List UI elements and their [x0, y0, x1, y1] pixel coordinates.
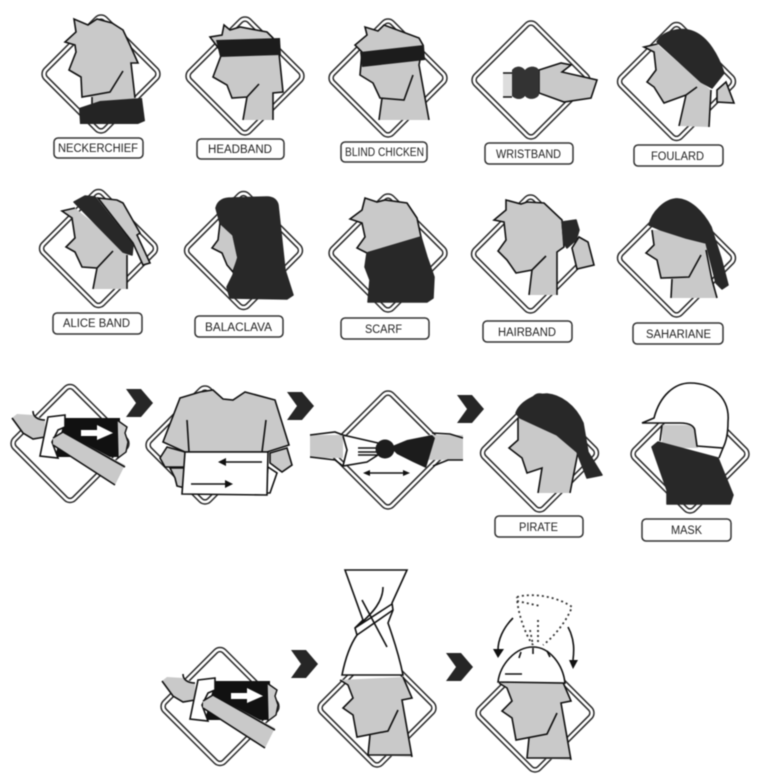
- arrow: chevron one: [126, 389, 153, 417]
- label: foulard: FOULARD: [651, 151, 704, 163]
- label: sahariane: SAHARIANE: [646, 329, 711, 341]
- label: sahariane: [633, 323, 723, 344]
- label: scarf: [341, 318, 429, 339]
- label: neckerchief: [54, 138, 143, 158]
- label: scarf: SCARF: [365, 324, 402, 336]
- label: hairband: HAIRBAND: [498, 327, 556, 339]
- icon: sahariane: [617, 199, 736, 317]
- label: blind chicken: [341, 142, 427, 162]
- arrow: chevron three: [457, 395, 484, 423]
- icon: neckerchief: [42, 15, 160, 133]
- label: foulard: [634, 145, 723, 166]
- label: headband: HEADBAND: [208, 144, 272, 156]
- arrow: chevron row four one: [291, 650, 318, 678]
- label: neckerchief: NECKERCHIEF: [58, 143, 138, 155]
- icon: hairband: [471, 195, 594, 313]
- label: mask: MASK: [671, 525, 702, 537]
- icon: mask with helmet: [631, 383, 749, 513]
- label: alice band: ALICE BAND: [63, 318, 130, 330]
- icon: scarf: [329, 194, 447, 312]
- icon: alice band: [39, 189, 158, 308]
- icon: twisted tube over head: [318, 570, 436, 767]
- icon: balaclava: [184, 191, 303, 310]
- arrow: chevron row four two: [446, 653, 473, 681]
- icon: twist step one: [161, 647, 279, 766]
- label: balaclava: [195, 316, 283, 337]
- label: pirate: [495, 516, 583, 537]
- icon: fold step one: [11, 384, 129, 503]
- icon: headband: [186, 17, 304, 135]
- icon: blind chicken: [329, 19, 447, 137]
- label: wristband: WRISTBAND: [496, 149, 561, 161]
- label: pirate: PIRATE: [519, 522, 558, 534]
- label: mask: [642, 519, 731, 541]
- icon: fold step three hands: [310, 391, 463, 509]
- icon: wristband: [472, 21, 597, 139]
- label: headband: [197, 139, 284, 159]
- arrow: chevron two: [287, 392, 314, 420]
- label: alice band: [53, 313, 142, 334]
- icon: fold step two shirt: [146, 386, 292, 504]
- icon: pirate: [480, 394, 602, 512]
- icon: fold over head: [476, 595, 594, 772]
- label: balaclava: BALACLAVA: [205, 322, 272, 334]
- label: wristband: [485, 143, 573, 164]
- icon: foulard: [617, 22, 736, 141]
- label: hairband: [483, 321, 572, 342]
- label: blind chicken: BLIND CHICKEN: [345, 147, 424, 159]
